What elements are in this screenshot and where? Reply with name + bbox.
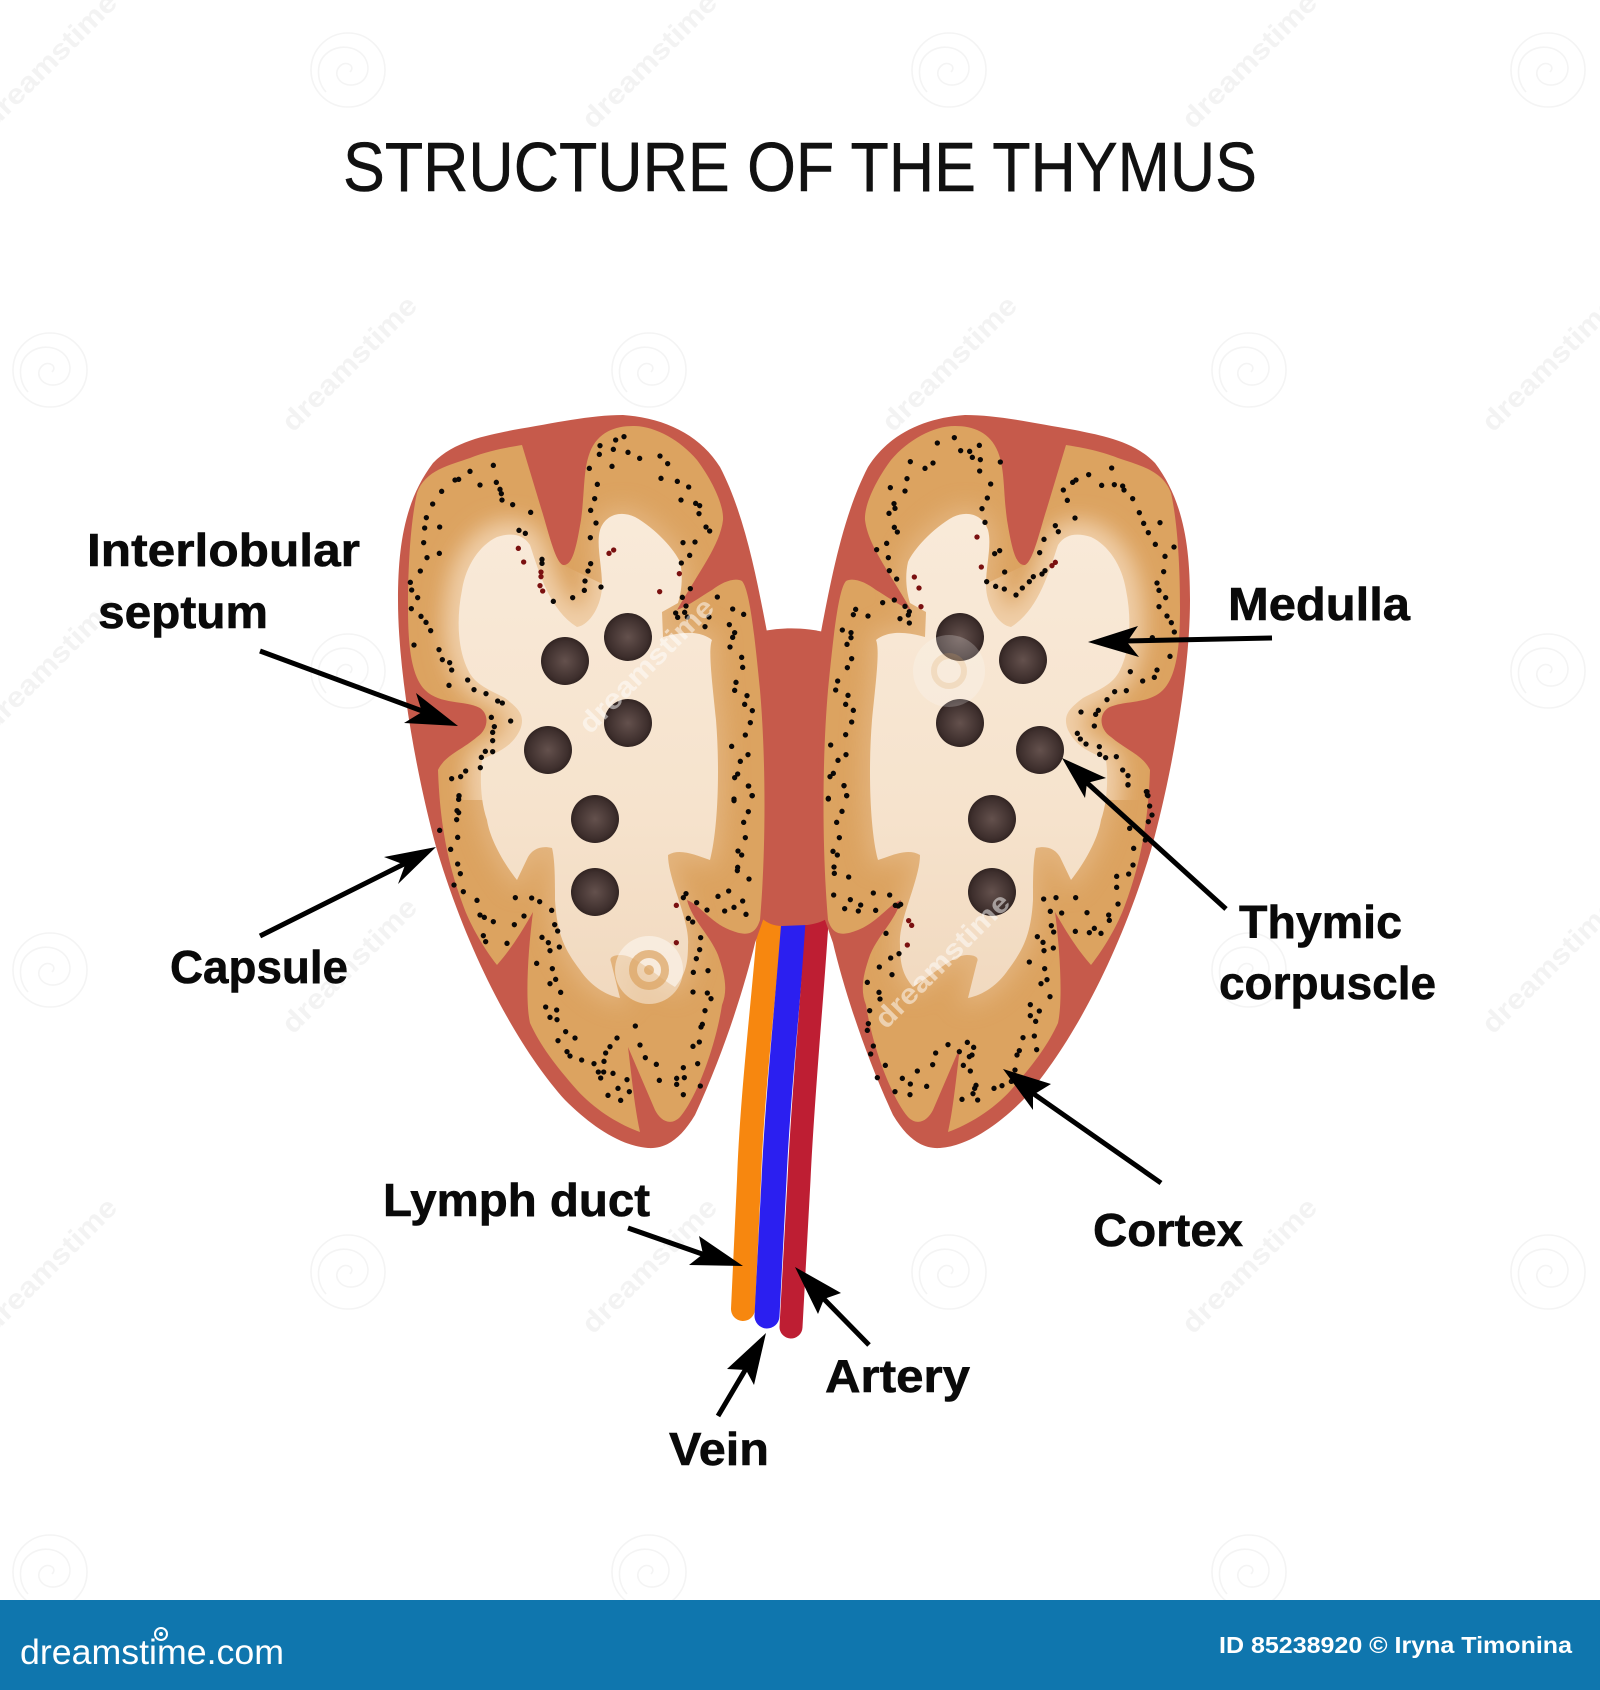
label: thymic corpuscle: corpuscle — [1219, 957, 1436, 1009]
label: interlobular septum: septum — [98, 586, 268, 638]
footer bar — [0, 1600, 1600, 1690]
label: interlobular septum — [87, 524, 360, 638]
vessels — [743, 905, 818, 1327]
arrow: medulla — [1088, 626, 1272, 657]
watermark pattern: dreamstime — [875, 289, 1023, 437]
label: cortex: Cortex — [1093, 1204, 1243, 1256]
title: STRUCTURE OF THE THYMUS — [343, 128, 1257, 206]
watermark pattern: dreamstime — [575, 1191, 723, 1339]
arrow: interlobular septum — [260, 651, 458, 726]
label: interlobular septum: Interlobular — [87, 524, 360, 576]
lymph duct vessel — [743, 905, 771, 1309]
right capsule — [818, 415, 1190, 1148]
watermark pattern: dreamstime — [1175, 1191, 1323, 1339]
left cortex — [408, 426, 764, 1132]
left medulla — [459, 514, 718, 998]
artery vessel — [791, 905, 818, 1327]
watermark pattern: dreamstime — [275, 891, 423, 1039]
isthmus connecting the lobes — [758, 628, 840, 926]
arrow: lymph duct — [628, 1228, 743, 1266]
arrow: vein — [718, 1333, 766, 1416]
label: capsule: Capsule — [170, 941, 348, 993]
footer credit: ID 85238920 © Iryna Timonina — [1219, 1632, 1572, 1658]
label: vein: Vein — [669, 1423, 769, 1475]
vein vessel — [767, 905, 795, 1316]
cortical cell dots — [410, 437, 1174, 1100]
arrow: cortex — [1003, 1069, 1161, 1183]
left lobe — [398, 415, 770, 1148]
thymic corpuscles — [524, 613, 1064, 916]
label: artery: Artery — [825, 1350, 970, 1402]
watermark pattern: dreamstime — [575, 0, 723, 134]
right cortex — [824, 426, 1180, 1132]
watermark pattern: dreamstime — [1175, 0, 1323, 134]
arrow: artery — [795, 1267, 869, 1345]
watermark over lobes: dreamstime — [868, 886, 1016, 1034]
label: thymic corpuscle — [1219, 896, 1436, 1009]
footer logo: dreamstime.com — [20, 1633, 284, 1672]
right medulla — [870, 514, 1129, 998]
watermark over lobes: dreamstime — [572, 591, 720, 739]
watermark over lobes — [572, 591, 1016, 1034]
right lobe — [818, 415, 1190, 1148]
label: lymph duct: Lymph duct — [383, 1174, 650, 1226]
label: thymic corpuscle: Thymic — [1239, 896, 1402, 948]
arrow: capsule — [260, 847, 436, 936]
arrow: thymic corpuscle — [1062, 758, 1226, 909]
watermark pattern: dreamstime — [275, 289, 423, 437]
label: medulla: Medulla — [1228, 578, 1410, 630]
left capsule — [398, 415, 770, 1148]
